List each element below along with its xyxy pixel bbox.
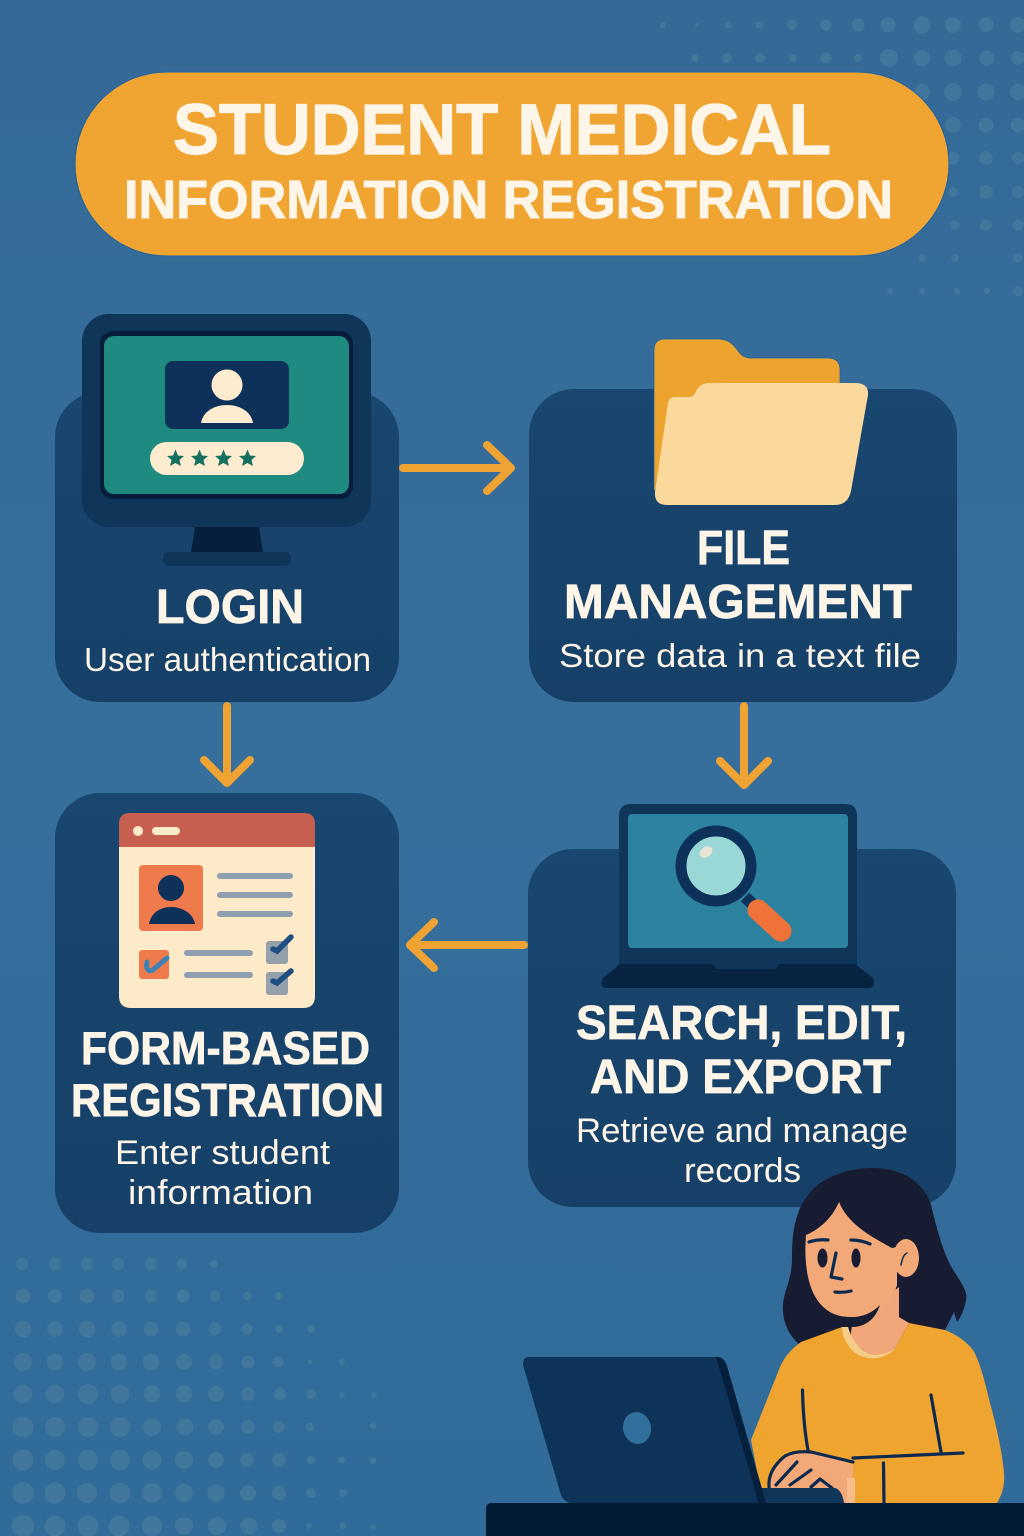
- icon: folder: [654, 339, 868, 505]
- heading: form-based registration: FORM-BASED: [81, 1022, 370, 1074]
- sweater lines: [769, 1390, 963, 1503]
- desk: [486, 1503, 1024, 1536]
- illustration: student at laptop: [486, 1168, 1024, 1536]
- panel: login: [55, 314, 399, 702]
- arrow: search to form registration: [410, 922, 524, 968]
- heading: file management: [564, 522, 912, 629]
- text: form description: [115, 1134, 331, 1212]
- laptop lid: [523, 1357, 766, 1503]
- facial features: [809, 1240, 870, 1292]
- heading: search, edit, and export: AND EXPORT: [590, 1051, 891, 1104]
- heading: file management: MANAGEMENT: [564, 576, 912, 629]
- jaw shadow: [842, 1305, 880, 1327]
- panel: form-based registration: [55, 793, 399, 1233]
- text: login description: User authentication: [84, 641, 371, 678]
- icon: login monitor: [82, 314, 371, 566]
- arrow: file management to search: [720, 706, 768, 785]
- panel: file management: [529, 339, 957, 702]
- text: search description: Retrieve and manage: [576, 1112, 908, 1150]
- heading: form-based registration: REGISTRATION: [71, 1074, 384, 1126]
- heading: login: LOGIN: [156, 581, 304, 634]
- neck: [850, 1287, 909, 1358]
- title banner: [75, 72, 949, 256]
- arrow: login to form registration: [204, 706, 250, 783]
- text: form description: Enter student: [115, 1134, 331, 1172]
- text: form description: information: [128, 1174, 313, 1212]
- heading: file management: FILE: [697, 522, 790, 575]
- face: [805, 1202, 897, 1317]
- hand: [769, 1451, 853, 1503]
- panel: search, edit, and export: [528, 804, 956, 1207]
- laptop keyboard: [762, 1488, 844, 1503]
- title banner: STUDENT MEDICAL: [173, 91, 831, 170]
- icon: laptop with magnifier: [601, 804, 874, 988]
- hair: [783, 1168, 966, 1345]
- heading: search, edit, and export: SEARCH, EDIT,: [576, 997, 907, 1050]
- ear: [893, 1239, 919, 1277]
- collar: [842, 1327, 895, 1358]
- eyes: [818, 1248, 860, 1268]
- heading: form-based registration: [71, 1022, 384, 1126]
- text: file description: Store data in a text file: [559, 637, 921, 674]
- heading: search, edit, and export: [576, 997, 907, 1104]
- laptop logo: [620, 1409, 654, 1447]
- text: search description: [576, 1112, 908, 1190]
- icon: registration form: [119, 813, 315, 1008]
- sweater: [751, 1323, 1004, 1503]
- arrow: login to file management: [403, 445, 511, 491]
- text: search description: records: [684, 1152, 801, 1190]
- title banner: INFORMATION REGISTRATION: [124, 170, 893, 230]
- laptop edge: [716, 1357, 766, 1503]
